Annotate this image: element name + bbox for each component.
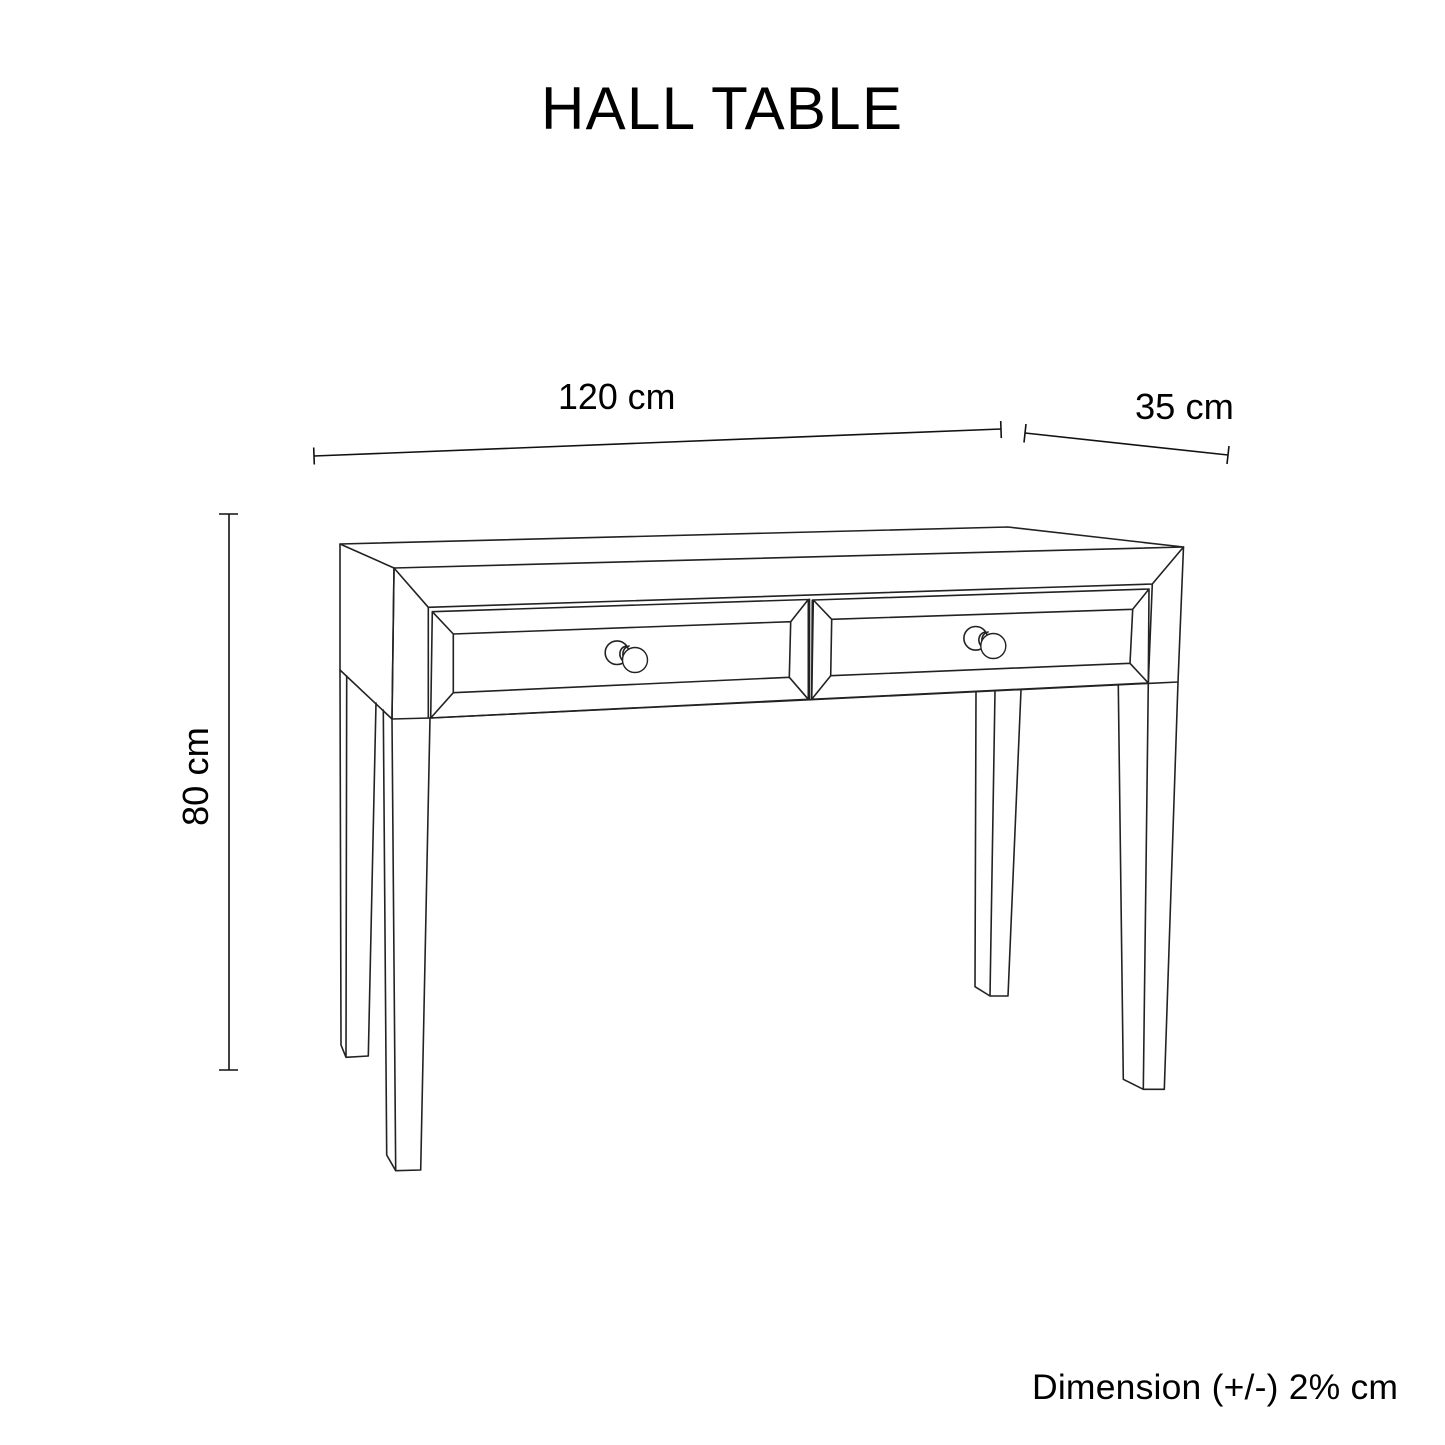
- left drawer knob: [605, 641, 648, 672]
- depth dimension: 35 cm: [1024, 386, 1234, 464]
- drawer divider: [810, 599, 812, 699]
- width dimension: 120 cm: [314, 377, 1001, 464]
- front right leg: [1118, 682, 1178, 1089]
- right drawer: [812, 589, 1149, 699]
- depth dimension: 35 cm: 35 cm: [1135, 386, 1234, 427]
- height dimension: 80 cm: 80 cm: [175, 727, 216, 826]
- table top: [340, 527, 1184, 568]
- back left leg: [340, 670, 376, 1057]
- right drawer knob: [964, 626, 1006, 658]
- front left leg: [383, 710, 430, 1171]
- front frame of table body: [392, 547, 1184, 719]
- left drawer: [431, 600, 808, 718]
- title: HALL TABLE: [541, 75, 902, 142]
- height dimension: 80 cm: [175, 514, 238, 1070]
- back right leg: [975, 690, 1021, 996]
- width dimension: 120 cm: 120 cm: [558, 377, 675, 417]
- hall table line drawing: [340, 527, 1184, 1171]
- tolerance note: Dimension (+/-) 2% cm: [1032, 1367, 1398, 1407]
- left side of table body: [340, 544, 394, 719]
